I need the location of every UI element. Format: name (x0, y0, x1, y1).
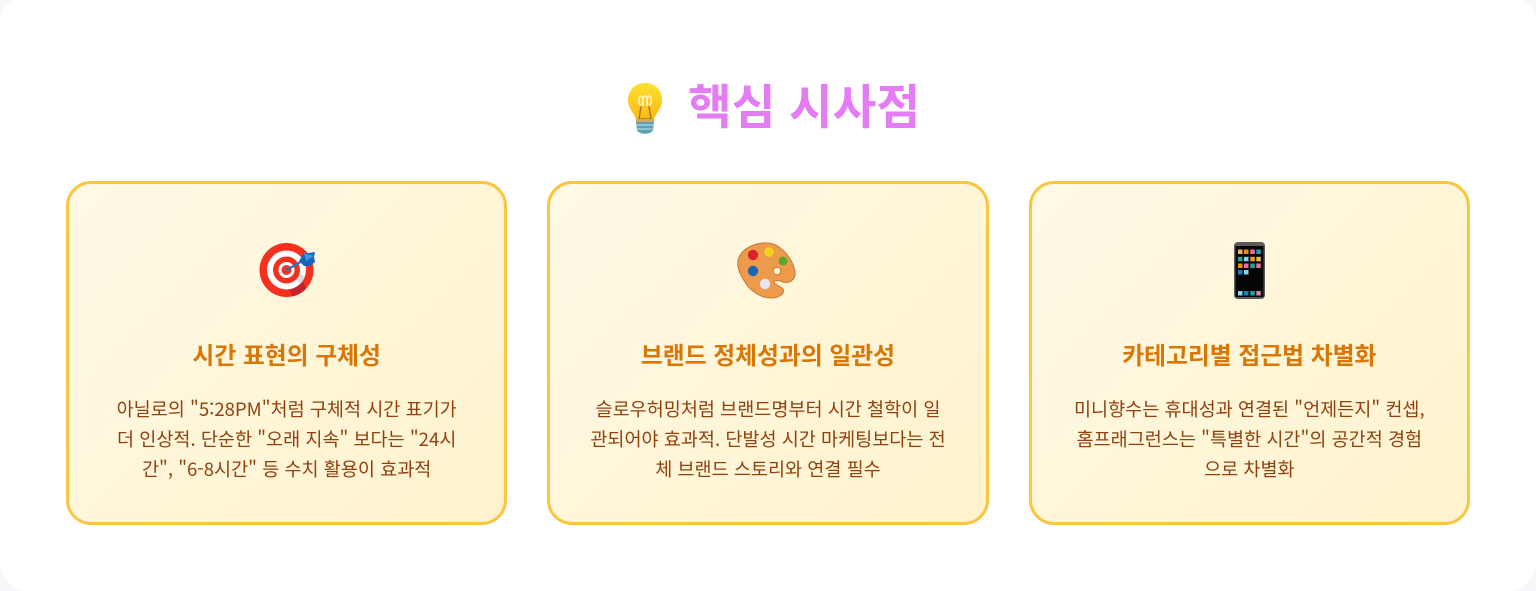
card body text: 관되어야 효과적. 단발성 시간 마케팅보다는 전 (590, 425, 946, 452)
icon: artist palette (737, 242, 796, 298)
card body text: 미니향수는 휴대성과 연결된 "언제든지" 컨셉, (1074, 395, 1425, 422)
card body text: 체 브랜드 스토리와 연결 필수 (655, 455, 881, 482)
icon: light bulb (628, 83, 662, 134)
card body text: 홈프래그런스는 "특별한 시간"의 공간적 경험 (1077, 425, 1422, 452)
card body text: 슬로우허밍처럼 브랜드명부터 시간 철학이 일 (596, 395, 940, 422)
title: 핵심 시사점 (688, 69, 920, 138)
card body text: 더 인상적. 단순한 "오래 지속" 보다는 "24시 (117, 425, 456, 452)
card body text: 간", "6-8시간" 등 수치 활용이 효과적 (142, 455, 431, 482)
panel: 시간 표현의 구체성 (66, 181, 507, 525)
icon: mobile phone (1234, 242, 1265, 299)
card heading: 브랜드 정체성과의 일관성 (641, 336, 895, 371)
card body text (590, 395, 946, 482)
card heading: 시간 표현의 구체성 (192, 336, 381, 371)
icon: target with dart (260, 243, 315, 297)
panel: 카테고리별 접근법 차별화 (1029, 181, 1470, 525)
card body text: 아닐로의 "5:28PM"처럼 구체적 시간 표기가 (117, 395, 457, 422)
panel: 브랜드 정체성과의 일관성 (547, 181, 989, 525)
card body text (1074, 395, 1425, 482)
card body text (117, 395, 457, 482)
card body text: 으로 차별화 (1204, 455, 1295, 482)
card heading: 카테고리별 접근법 차별화 (1122, 336, 1376, 371)
